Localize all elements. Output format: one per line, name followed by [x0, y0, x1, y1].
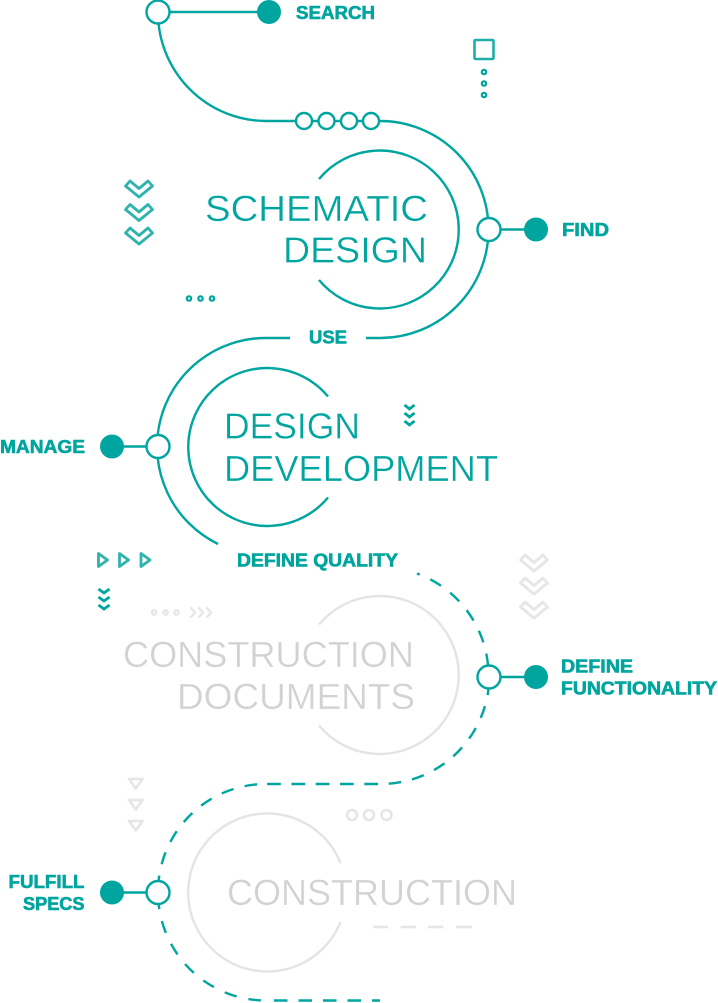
step: find: FIND	[562, 220, 609, 240]
icon: three outlined chevrons	[126, 181, 152, 244]
icon: square with dots	[474, 40, 494, 97]
icon: grey dots and chevrons	[152, 608, 211, 618]
phase: design development	[188, 368, 498, 526]
phase: design development: DESIGN	[224, 406, 360, 446]
step: define functionality: FUNCTIONALITY	[561, 678, 717, 698]
dashed path: straight run	[267, 783, 378, 785]
step: fulfill specs	[8, 872, 170, 914]
step: fulfill specs: SPECS	[23, 894, 84, 914]
label: define quality: DEFINE QUALITY	[237, 550, 398, 570]
step: define functionality	[478, 656, 717, 698]
step: fulfill specs: FULFILL	[8, 872, 84, 892]
phase: construction	[188, 813, 517, 971]
phase: construction documents: DOCUMENTS	[177, 676, 415, 717]
step: manage	[0, 434, 170, 458]
dashed path: define quality to define functionality	[417, 574, 489, 677]
phase: construction documents: CONSTRUCTION	[123, 634, 414, 675]
phase: schematic design: DESIGN	[283, 230, 427, 270]
dashed path: fulfill specs curve	[158, 892, 266, 1000]
path: search to find and use	[158, 12, 489, 338]
dashed path: define functionality to mid curve	[380, 689, 488, 784]
path: use to manage and define quality	[157, 338, 290, 544]
dashed path: curve to fulfill specs	[158, 784, 266, 892]
step: find	[478, 218, 609, 242]
phase: construction documents	[123, 596, 459, 754]
connector nodes: four small circles	[296, 113, 379, 129]
step: search: SEARCH	[296, 3, 375, 23]
dashed path: end run	[266, 999, 380, 1002]
step: search	[146, 0, 375, 24]
phase: schematic design	[205, 150, 459, 308]
icon: grey dashes	[373, 926, 472, 928]
icon: grey down triangles	[129, 779, 142, 830]
step: define functionality: DEFINE	[561, 656, 633, 676]
icon: three right triangles	[98, 554, 150, 566]
phase: schematic design: SCHEMATIC	[205, 188, 428, 229]
icon: grey outlined chevrons	[520, 555, 548, 618]
phase: design development: DEVELOPMENT	[224, 448, 498, 489]
step: manage: MANAGE	[0, 437, 85, 457]
icon: grey rings	[347, 810, 392, 820]
icon: small down chevrons lower	[98, 589, 110, 609]
phase: construction: CONSTRUCTION	[227, 872, 517, 913]
label: use: USE	[309, 328, 347, 348]
icon: small down chevrons	[404, 405, 414, 425]
icon: three dots	[187, 296, 214, 301]
